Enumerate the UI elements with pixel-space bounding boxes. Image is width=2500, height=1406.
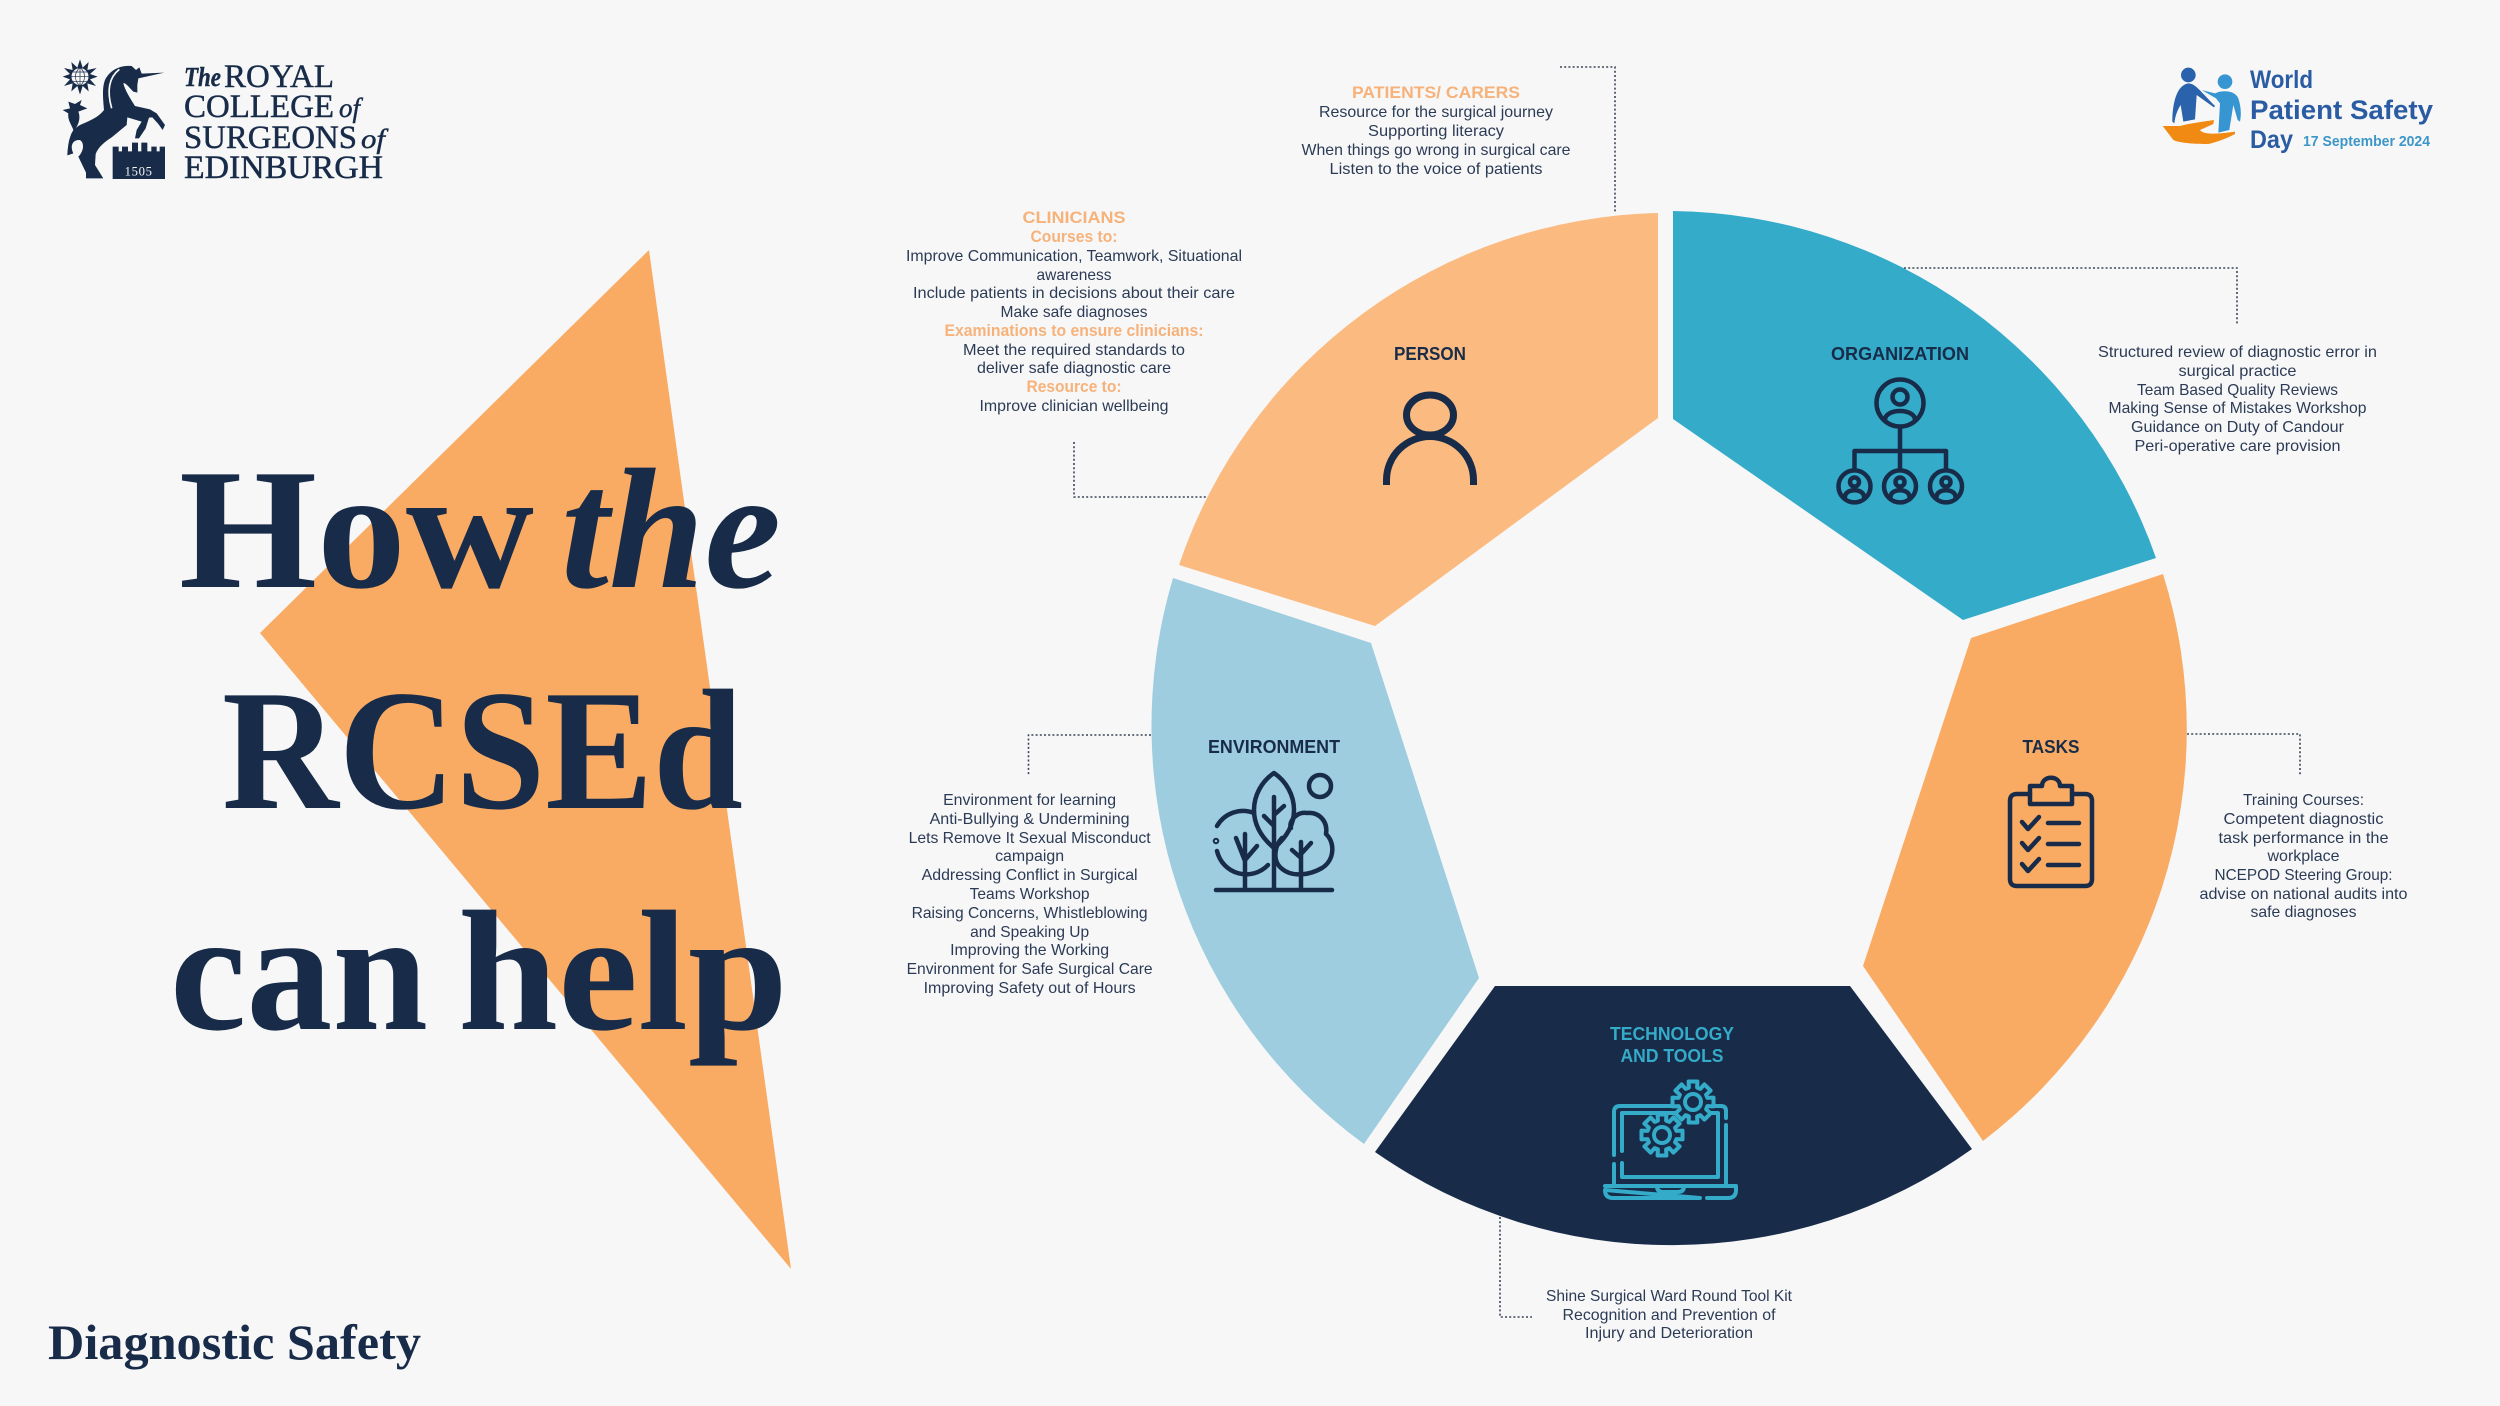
text block: environment: Environment for learning (943, 792, 1116, 809)
text block: technology and tools (1546, 1288, 1793, 1342)
icon: unicorn crest: 1505 (125, 164, 153, 178)
text block: technology and tools: Shine Surgical Ward Round Tool Kit (1546, 1288, 1793, 1305)
orange background triangle (260, 250, 791, 1269)
segment shape (1375, 986, 1972, 1245)
panel: person segment (1179, 213, 1658, 626)
text block: clinicians: Examinations to ensure clinicians: (944, 322, 1204, 340)
organization heading: ORGANIZATION (1831, 344, 1969, 364)
logo wordmark: EDINBURGH (184, 150, 383, 186)
icon: two figures and hand (2163, 68, 2241, 144)
text block: environment: Improving the Working (950, 942, 1109, 959)
panel: tasks segment (1863, 574, 2187, 1141)
logo wordmark: ROYAL (224, 59, 334, 95)
title: the (561, 435, 781, 625)
text block: technology and tools: Injury and Deterioration (1585, 1325, 1753, 1342)
text block: tasks: advise on national audits into (2200, 886, 2408, 903)
segment shape (1179, 213, 1658, 626)
text block: tasks (2200, 792, 2408, 921)
logo: World Patient Safety Day: 17 September 2024 (2303, 134, 2430, 150)
logo: World Patient Safety Day: Day (2250, 126, 2293, 154)
person heading: PERSON (1394, 344, 1466, 364)
title (170, 435, 788, 1067)
logo wordmark: of (339, 93, 363, 123)
icon: clipboard checklist (2010, 778, 2092, 886)
text block: patients and carers: Resource for the surgical journey (1319, 104, 1553, 121)
text block: patients and carers: When things go wrong in surgical care (1302, 142, 1571, 159)
text block: clinicians (906, 209, 1242, 415)
text block: tasks: NCEPOD Steering Group: (2214, 867, 2392, 884)
text block: environment (907, 792, 1153, 997)
text block: clinicians: deliver safe diagnostic care (977, 360, 1171, 377)
text block: organization: Guidance on Duty of Candour (2131, 419, 2345, 436)
text block: environment: Teams Workshop (970, 886, 1090, 903)
environment heading: ENVIRONMENT (1208, 737, 1340, 757)
title: can (170, 877, 428, 1067)
text block: organization: surgical practice (2178, 363, 2297, 380)
text block: clinicians: Resource to: (1026, 378, 1122, 396)
icon: org chart (1838, 380, 1962, 502)
panel: environment segment (1152, 578, 1479, 1144)
text block: environment: Addressing Conflict in Surgical (922, 867, 1138, 884)
title: How (179, 435, 534, 625)
icon: laptop with gears (1605, 1082, 1736, 1198)
logo wordmark: The (184, 62, 221, 92)
text block: tasks: task performance in the (2218, 830, 2389, 847)
logo wordmark: SURGEONS (184, 120, 357, 156)
text block: patients and carers (1302, 84, 1571, 178)
text block: clinicians: Improve Communication, Teamwork, Situational (906, 248, 1242, 265)
title: help (458, 877, 788, 1067)
tasks heading: TASKS (2022, 737, 2080, 757)
text block: tasks: Training Courses: (2243, 792, 2364, 809)
logo: World Patient Safety Day (2163, 66, 2433, 154)
logo: Royal College of Surgeons of Edinburgh (63, 59, 389, 186)
text block: clinicians: Improve clinician wellbeing (980, 398, 1168, 415)
text block: environment: Raising Concerns, Whistleblowing (912, 905, 1148, 922)
text block: environment: campaign (995, 848, 1064, 865)
panel: organization segment (1673, 211, 2156, 620)
icon: person (1386, 395, 1474, 485)
segment shape (1863, 574, 2187, 1141)
icon: unicorn crest (63, 59, 165, 179)
logo: World Patient Safety Day: Patient Safety (2250, 95, 2433, 125)
dotted connector lines (1028, 67, 2300, 1317)
text block: clinicians: CLINICIANS (1022, 209, 1126, 227)
technology heading (1610, 1024, 1734, 1066)
segment shape (1673, 211, 2156, 620)
logo wordmark (184, 59, 389, 186)
panel: technology and tools segment (1375, 986, 1972, 1245)
text block: clinicians: Meet the required standards to (963, 342, 1185, 359)
text block: clinicians: Make safe diagnoses (1000, 304, 1148, 321)
text block: environment: Anti-Bullying & Undermining (930, 811, 1130, 828)
text block: clinicians: awareness (1036, 267, 1112, 284)
text block: patients and carers: Supporting literacy (1368, 123, 1504, 140)
text block: tasks: safe diagnoses (2250, 904, 2356, 921)
text block: tasks: Competent diagnostic (2224, 811, 2384, 828)
logo wordmark: COLLEGE (184, 89, 334, 125)
text block: tasks: workplace (2267, 848, 2340, 865)
text block: organization: Team Based Quality Reviews (2137, 382, 2338, 399)
text block: organization (2098, 344, 2377, 455)
technology heading: TECHNOLOGY (1610, 1024, 1734, 1044)
technology heading: AND TOOLS (1620, 1046, 1724, 1066)
text block: clinicians: Include patients in decisions about their care (913, 285, 1235, 302)
text block: environment: Environment for Safe Surgical Care (907, 961, 1153, 978)
text block: environment: Lets Remove It Sexual Misconduct (909, 830, 1151, 847)
icon: trees and sun (1215, 773, 1332, 890)
text block: patients and carers: PATIENTS/ CARERS (1352, 84, 1520, 102)
text block: technology and tools: Recognition and Prevention of (1562, 1307, 1776, 1324)
text block: patients and carers: Listen to the voice of patients (1330, 161, 1542, 178)
text block: clinicians: Courses to: (1030, 228, 1118, 246)
text block: environment: Improving Safety out of Hours (924, 980, 1136, 997)
logo wordmark: of (361, 124, 389, 154)
title: RCSEd (222, 656, 743, 846)
text block: organization: Peri-operative care provision (2134, 438, 2340, 455)
text block: organization: Making Sense of Mistakes Workshop (2108, 400, 2367, 417)
text block: organization: Structured review of diagnostic error in (2098, 344, 2377, 361)
segment shape (1152, 578, 1479, 1144)
logo: World Patient Safety Day: World (2250, 66, 2313, 94)
subtitle: Diagnostic Safety: Diagnostic Safety (48, 1314, 421, 1370)
text block: environment: and Speaking Up (970, 924, 1089, 941)
